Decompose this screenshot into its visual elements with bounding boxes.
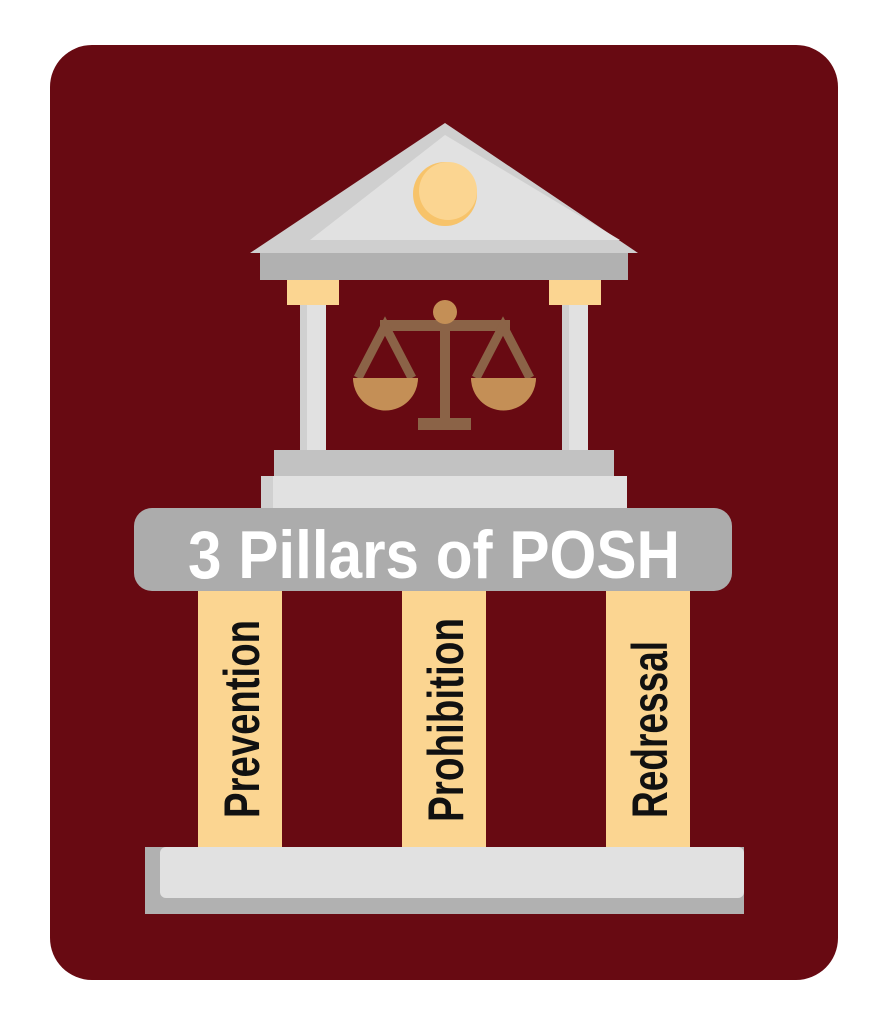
steps	[261, 450, 627, 510]
pillar: Redressal	[606, 591, 690, 848]
pillar: Prohibition: Prohibition	[418, 618, 474, 822]
pillar: Prohibition	[402, 591, 486, 848]
roof	[250, 123, 638, 253]
title band	[134, 508, 732, 593]
icon: courthouse	[250, 123, 638, 510]
pillar: Prevention	[198, 591, 282, 848]
title: 3 Pillars of POSH	[188, 517, 680, 593]
entablature	[260, 253, 628, 280]
pillar: Prevention: Prevention	[214, 620, 270, 818]
base	[145, 847, 744, 914]
columns	[300, 305, 588, 451]
pillar: Redressal: Redressal	[622, 641, 678, 818]
capitals	[287, 280, 601, 305]
icon: emblem circle	[413, 162, 477, 226]
icon: scales of justice	[353, 300, 536, 430]
